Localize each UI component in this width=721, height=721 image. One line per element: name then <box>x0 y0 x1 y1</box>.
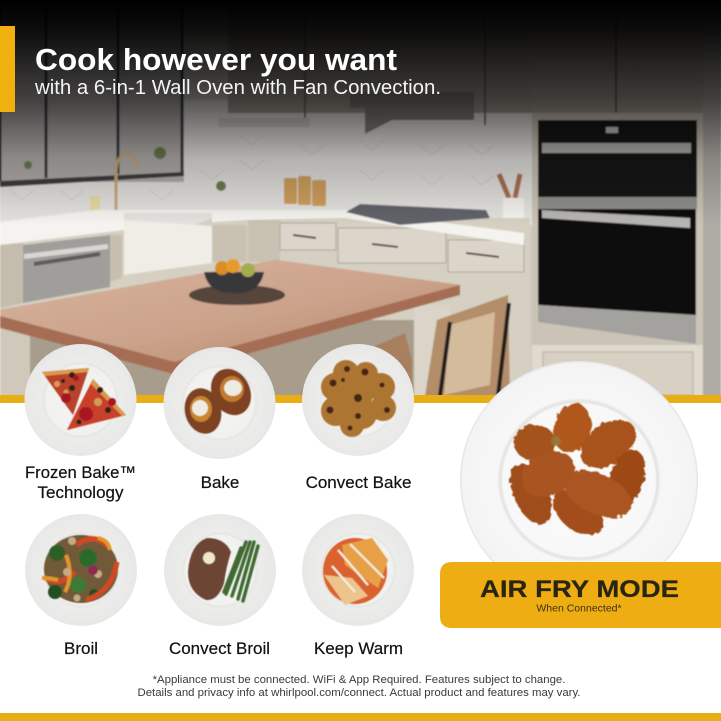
utensil crock <box>499 174 520 198</box>
label: frozen bake: Frozen Bake™ <box>25 463 136 482</box>
countertop <box>0 210 524 245</box>
farmhouse sink <box>124 220 212 275</box>
chair <box>300 295 510 396</box>
badge subtitle: When Connected* <box>536 602 622 614</box>
label: broil: Broil <box>64 639 98 658</box>
heading: Cook however you want <box>35 42 397 77</box>
subheading: with a 6-in-1 Wall Oven with Fan Convection. <box>34 77 441 99</box>
air fry badge <box>440 562 721 628</box>
label: keep warm: Keep Warm <box>314 639 403 658</box>
fruit bowl <box>204 272 264 293</box>
plate: broil vegetables <box>25 514 137 626</box>
oven cabinet <box>532 143 702 344</box>
kitchen photo <box>0 0 721 396</box>
footnote: Details and privacy info at whirlpool.com/connect. Actual product and features may vary. <box>138 687 580 699</box>
lower cabinets <box>196 218 530 226</box>
label: frozen bake: Technology <box>37 483 124 502</box>
jars <box>284 176 326 206</box>
plate: bake potatoes <box>164 347 276 459</box>
upper cabinets <box>228 56 532 114</box>
badge title: AIR FRY MODE <box>480 576 679 603</box>
label: frozen bake <box>25 463 136 502</box>
footnote <box>138 674 580 699</box>
island body <box>0 320 415 396</box>
wall oven <box>538 120 697 344</box>
plate: convect broil steak <box>164 514 276 626</box>
shelf plants <box>24 147 226 191</box>
label: convect broil: Convect Broil <box>169 639 270 658</box>
placemat <box>189 285 285 305</box>
plate: convect bake cookies <box>302 344 414 456</box>
soap <box>90 196 100 214</box>
plate: frozen bake pizza <box>24 344 136 456</box>
top dark gradient <box>0 0 721 225</box>
backsplash wall <box>0 100 532 225</box>
yellow divider band <box>0 395 721 403</box>
dishwasher <box>23 235 110 303</box>
bottom yellow band <box>0 713 721 721</box>
footnote: *Appliance must be connected. WiFi & App Required. Features subject to change. <box>153 674 565 686</box>
plate: keep warm enchiladas <box>302 514 414 626</box>
label: convect bake: Convect Bake <box>306 473 411 492</box>
window <box>0 80 184 182</box>
faucet <box>116 154 138 212</box>
island top <box>0 284 461 374</box>
yellow accent tab <box>0 26 15 112</box>
range hood <box>350 92 474 134</box>
label: bake: Bake <box>201 473 239 492</box>
cooktop <box>346 204 490 225</box>
big plate: air fry chicken <box>460 361 698 562</box>
